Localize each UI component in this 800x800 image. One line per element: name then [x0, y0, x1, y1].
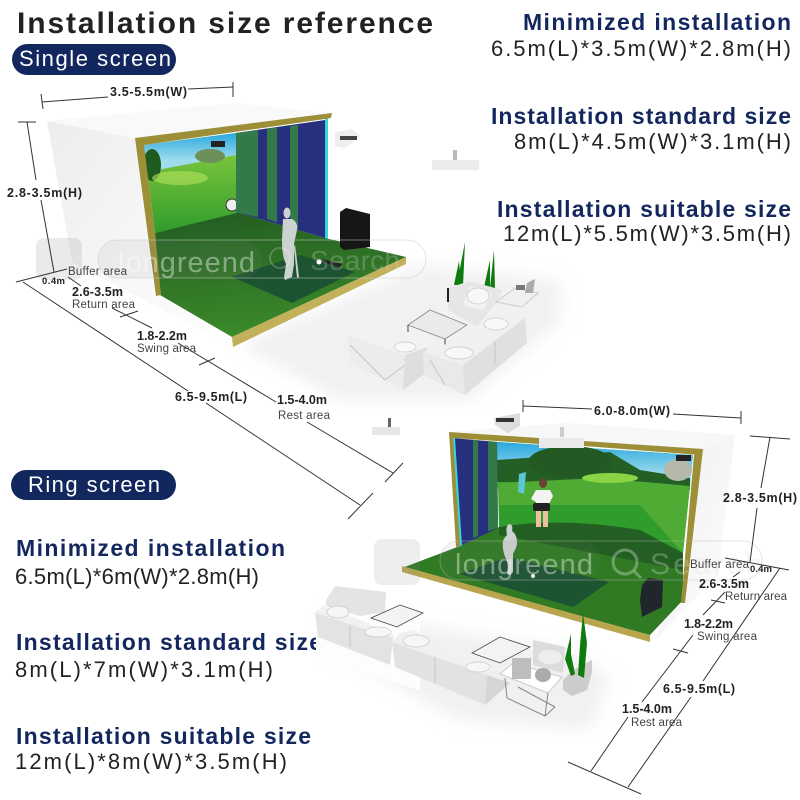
minimized installation size: Minimized installation: [16, 535, 285, 561]
right sofa: [392, 630, 510, 705]
buffer area: 0.4m: [42, 276, 65, 287]
plant and pot: [563, 613, 592, 696]
projector: [335, 129, 360, 148]
speaker: [340, 208, 370, 250]
ceiling projector unit: [432, 150, 479, 170]
swing area: [642, 617, 758, 702]
side table with laptop: [500, 658, 562, 716]
watermark: ring screen: longreend: [455, 549, 593, 581]
back armchair: [326, 586, 386, 616]
armchair: [448, 281, 502, 327]
length dimension: 6.5-9.5m(L): [663, 682, 735, 696]
swing area: 1.8-2.2m: [137, 329, 187, 343]
plants: [454, 242, 495, 288]
minimized installation size: [491, 9, 791, 61]
suitable installation size: [497, 196, 791, 246]
left sofa: [315, 606, 395, 665]
standard installation size: [491, 103, 791, 154]
hitting mat: [232, 255, 355, 303]
golfer silhouette: [282, 208, 299, 280]
coffee tables: [371, 605, 530, 663]
height dimension: [7, 122, 82, 282]
floor projector unit: [372, 418, 400, 435]
standard installation size: 8m(L)*7m(W)*3.1m(H): [15, 657, 273, 682]
room shell: [449, 423, 735, 640]
side table and laptop: [496, 279, 538, 307]
watermark: ring screen: [374, 539, 762, 585]
room shell: [47, 103, 332, 347]
rest area: Rest area: [631, 717, 683, 729]
left sofa: [347, 325, 427, 390]
armchair: [533, 640, 565, 673]
furniture lounge: [315, 586, 592, 716]
gold frame: [135, 113, 332, 296]
ceiling unit: [539, 427, 584, 448]
length dimension: [568, 568, 780, 794]
swing area: Swing area: [137, 343, 197, 355]
dimensions: ring screen: [523, 400, 797, 794]
golf ball and tee: [316, 259, 342, 267]
woman on screen: [518, 472, 553, 527]
rest area: [277, 393, 403, 482]
dimensions: single screen: [7, 82, 403, 519]
buffer area: Buffer area: [68, 266, 128, 278]
gold frame: [449, 432, 703, 603]
title: Installation size reference: [17, 7, 433, 40]
heading pill: single screen: Single screen: [19, 46, 171, 71]
standard installation size: Installation standard size: [16, 629, 322, 655]
text block: single screen sizes: [491, 9, 791, 246]
rest area: Rest area: [278, 410, 331, 422]
minimized installation size: [15, 535, 285, 589]
cushions: [394, 288, 508, 359]
width dimension: [41, 82, 233, 109]
watermark: ring screen: Search: [650, 548, 762, 581]
rest area: [591, 702, 683, 771]
curved screen: [497, 442, 693, 570]
screen: [143, 133, 238, 233]
swing area: 1.8-2.2m: [684, 617, 733, 631]
return area: Return area: [725, 591, 788, 603]
watermark: single screen: [36, 238, 426, 280]
width dimension: 3.5-5.5m(W): [110, 85, 187, 99]
buffer area: [42, 266, 128, 287]
return area: [699, 572, 788, 615]
side wall panels: [236, 118, 328, 239]
buffer area: [690, 559, 772, 575]
speaker: [640, 578, 663, 617]
length dimension: 6.5-9.5m(L): [175, 390, 247, 404]
height dimension: [723, 436, 797, 570]
suitable installation size: 12m(L)*5.5m(W)*3.5m(H): [503, 221, 791, 246]
return area: [68, 277, 152, 328]
watermark: single screen: Search: [310, 245, 400, 276]
heading pill: ring screen: [11, 470, 176, 500]
heading pill: ring screen: Ring screen: [28, 472, 160, 497]
minimized installation size: 6.5m(L)*6m(W)*2.8m(H): [15, 564, 259, 589]
minimized installation size: Minimized installation: [523, 9, 791, 35]
height dimension: 2.8-3.5m(H): [723, 491, 797, 505]
golf ball: [531, 574, 535, 578]
minimized installation size: 6.5m(L)*3.5m(W)*2.8m(H): [491, 36, 791, 61]
return area: 2.6-3.5m: [699, 577, 749, 591]
suitable installation size: 12m(L)*8m(W)*3.5m(H): [15, 749, 287, 774]
standard installation size: Installation standard size: [491, 103, 791, 129]
rest area: 1.5-4.0m: [622, 702, 672, 716]
standard installation size: 8m(L)*4.5m(W)*3.1m(H): [514, 129, 791, 154]
hitting mat: [459, 557, 609, 607]
furniture lounge: [347, 242, 538, 395]
floor: [155, 212, 406, 347]
suitable installation size: [15, 723, 311, 774]
right sofa: [423, 310, 527, 395]
height dimension: 2.8-3.5m(H): [7, 186, 82, 200]
golfer silhouette: [503, 524, 517, 575]
cushions: [327, 606, 490, 672]
return area: 2.6-3.5m: [72, 285, 123, 299]
projector: [494, 413, 520, 433]
length dimension: [23, 282, 373, 519]
buffer area: Buffer area: [690, 559, 750, 571]
left wall panels: [453, 438, 498, 546]
floor mask over text: [316, 604, 420, 690]
return area: Return area: [72, 299, 136, 311]
text block: ring screen sizes: [15, 535, 322, 774]
suitable installation size: Installation suitable size: [497, 196, 791, 222]
floor: [402, 527, 683, 642]
illustration: ring screen room: [315, 413, 735, 730]
buffer area: 0.4m: [750, 564, 772, 575]
illustration: single screen room: [47, 103, 560, 435]
coffee table: [408, 310, 467, 347]
swing area: [137, 329, 276, 402]
swing area: Swing area: [697, 631, 758, 643]
watermark: single screen: longreend: [118, 247, 255, 279]
rest area: 1.5-4.0m: [277, 393, 327, 407]
suitable installation size: Installation suitable size: [16, 723, 311, 749]
standard installation size: [15, 629, 322, 682]
width dimension: 6.0-8.0m(W): [594, 404, 670, 418]
width dimension: [523, 400, 741, 424]
